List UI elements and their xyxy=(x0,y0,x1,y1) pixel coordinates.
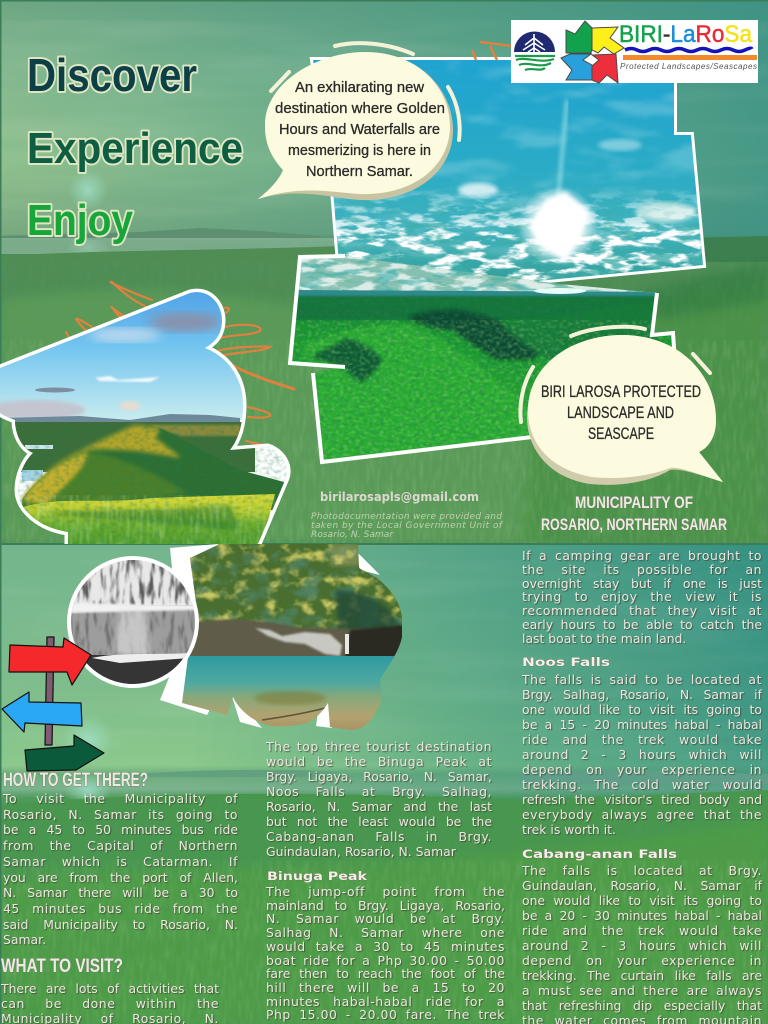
text block: Noos Falls: around 2 - 3 hours which will xyxy=(522,746,762,762)
heading: how to get there: HOW TO GET THERE? xyxy=(3,770,148,791)
text block: Binuga Peak: Salhag N. Samar where one xyxy=(266,925,505,940)
text block: Noos Falls: one would like to visit its going to xyxy=(522,702,762,716)
text block: top three destinations: Brgy. Ligaya, Rosario, N. Samar, xyxy=(266,768,492,784)
orange scribble rays behind left photo xyxy=(66,282,294,447)
text block: Binuga Peak: mainland to Brgy. Ligaya, Rosario, xyxy=(266,898,505,913)
text block: camping xyxy=(522,548,763,646)
speech bubble: exhilarating destination: An exhilarating new xyxy=(295,80,425,96)
text block: how to get there: N. Samar there will be a 30 to xyxy=(3,885,238,900)
logo subtitle: Protected Landscapes/Seascapes xyxy=(620,62,757,71)
photo: sky with sun and clouds xyxy=(310,57,706,283)
title: Discover Experience Enjoy: Experience xyxy=(27,124,243,173)
speech bubble: exhilarating destination: destination where Golden xyxy=(275,101,445,117)
text block: camping: trying to enjoy the view it is xyxy=(522,589,762,604)
title: Discover Experience Enjoy: Discover xyxy=(27,49,197,101)
text block: what to visit xyxy=(0,980,220,1024)
text block: top three destinations: but not the least would be the xyxy=(266,814,492,828)
text block: Noos Falls: The falls is said to be located at xyxy=(522,672,762,686)
text block: Binuga Peak: hill there will be a 15 to 20 xyxy=(266,980,505,995)
text block: top three destinations xyxy=(266,738,493,859)
speech bubble: Biri Larosa: SEASCAPE xyxy=(588,424,654,443)
municipality label xyxy=(541,493,727,534)
text block: top three destinations: Cabang-anan Falls in Brgy. xyxy=(266,828,492,844)
signpost pole xyxy=(45,637,54,745)
speech bubble: exhilarating destination xyxy=(258,43,460,200)
text block: how to get there: Samar which is Catarman. If xyxy=(3,854,238,869)
blue arrow xyxy=(2,692,82,732)
text block: how to get there: 45 minutes bus ride from the xyxy=(3,901,238,916)
photo credit caption xyxy=(311,512,504,540)
logo wordmark: BIRI-LaRoSa xyxy=(619,21,753,48)
text block: Noos Falls: be a 15 - 20 minutes habal - habal xyxy=(522,716,762,732)
heading: Binuga Peak: Binuga Peak xyxy=(267,869,367,883)
icon: four-colour puzzle mark xyxy=(561,21,624,83)
text block: camping: overnight stay but if one is just xyxy=(522,576,762,591)
logo: Biri-LaRoSa protected landscapes xyxy=(511,20,758,83)
text block: Noos Falls: trekking. The cold water would xyxy=(522,776,762,792)
text block: Noos Falls: Brgy. Salhag, Rosario, N. Samar if xyxy=(522,686,762,702)
email address: birilarosapls@gmail.com xyxy=(320,489,479,504)
text block: how to get there: said Municipality to Rosario, N. xyxy=(3,917,238,932)
text block: Cabang-anan Falls: ride and the trek would take xyxy=(522,922,762,938)
heading: Noos Falls: Noos Falls xyxy=(522,655,610,669)
panel: bottom background with sky and grass landscape xyxy=(0,544,768,1024)
title: Discover Experience Enjoy xyxy=(27,49,243,245)
wave and bar xyxy=(625,48,752,52)
text block: camping: If a camping gear are brought to xyxy=(522,548,762,563)
photo: black and white waterfall circle xyxy=(67,556,199,688)
text block: Cabang-anan Falls: depend on your experience in xyxy=(522,952,762,968)
text block: top three destinations: The top three tourist destination xyxy=(266,738,492,754)
text block: how to get there xyxy=(2,791,239,947)
text block: Binuga Peak xyxy=(266,884,506,1023)
text block: how to get there: you are from the port of Allen, xyxy=(3,870,238,885)
heading: what to visit: WHAT TO VISIT? xyxy=(1,956,123,977)
text block: Cabang-anan Falls: trekking. The curtain like falls are xyxy=(522,968,762,982)
municipality label: MUNICIPALITY OF xyxy=(575,493,693,512)
text block: Noos Falls: everybody always agree that the xyxy=(522,806,762,822)
text block: Cabang-anan Falls: a must see and there are always xyxy=(522,982,762,998)
signpost with three arrows xyxy=(2,637,104,771)
text block: what to visit: can be done within the xyxy=(1,996,219,1010)
text block: how to get there: To visit the Municipality of xyxy=(3,791,238,806)
icon: agency seal xyxy=(514,32,555,70)
heading: Cabang-anan Falls: Cabang-anan Falls xyxy=(522,847,677,861)
text block: Cabang-anan Falls: Guindaulan, Rosario, N. Samar if xyxy=(522,878,762,892)
text block: camping: the site its possible for an xyxy=(522,562,762,577)
text block: Noos Falls: refresh the visitor's tired body and xyxy=(522,792,762,806)
text block: Cabang-anan Falls: The falls is located at Brgy. xyxy=(522,862,762,878)
text block: how to get there: be a 45 to 50 minutes bus ride xyxy=(3,822,238,837)
text block: Binuga Peak: Php 15.00 - 20.00 fare. The trek xyxy=(266,1007,505,1022)
speech bubble: exhilarating destination: mesmerizing is here in xyxy=(288,143,431,159)
green arrow xyxy=(25,735,104,771)
text block: camping: recommended that they visit at xyxy=(522,603,762,618)
photo credit caption: taken by the Local Government Unit of xyxy=(311,521,504,531)
text block: Cabang-anan Falls: one would like to visit its going to xyxy=(522,892,762,908)
photo: waterfall pool in white-backed blob xyxy=(160,544,405,732)
red arrow xyxy=(9,638,91,685)
title: Discover Experience Enjoy: Enjoy xyxy=(27,196,133,245)
text block: Cabang-anan Falls xyxy=(522,862,764,1024)
text block: top three destinations: would be the Binuga Peak at xyxy=(266,754,492,768)
decorative orange scribble behind logo xyxy=(472,42,512,60)
text block: camping: early hours to be able to catch the xyxy=(522,617,762,632)
text block: Cabang-anan Falls: around 2 - 3 hours which will xyxy=(522,938,762,952)
photo credit caption: Rosario, N. Samar xyxy=(311,530,394,540)
text block: Binuga Peak: The jump-off point from the xyxy=(266,884,505,899)
text block: Noos Falls: trek is worth it. xyxy=(522,822,616,836)
text block: Binuga Peak: minutes habal-habal ride for a xyxy=(266,994,505,1009)
speech bubble: Biri Larosa: BIRI LAROSA PROTECTED xyxy=(541,382,701,401)
text block: Binuga Peak: boat ride for a Php 30.00 - 50.00 xyxy=(266,953,505,968)
text block: top three destinations: Noos Falls at Brgy. Salhag, xyxy=(266,784,492,798)
text block: top three destinations: Guindaulan, Rosario, N. Samar xyxy=(266,844,456,858)
text block: Binuga Peak: N. Samar would be at Brgy. xyxy=(266,911,505,926)
text block: Cabang-anan Falls: that refreshing dip especially that xyxy=(522,998,762,1012)
panel: top background with sky and grass landscape xyxy=(0,0,768,544)
speech bubble: Biri Larosa: LANDSCAPE AND xyxy=(567,403,674,422)
speech bubble: Biri Larosa xyxy=(520,327,723,485)
text block: Noos Falls: depend on your experience in xyxy=(522,762,762,776)
speech bubble: exhilarating destination: Northern Samar. xyxy=(306,164,413,180)
text block: camping: last boat to the main land. xyxy=(522,631,686,646)
photo: green hills under the sky xyxy=(285,250,705,466)
photo: yellow-green hills with blue sky in white blob frame xyxy=(0,285,300,545)
text block: Noos Falls: ride and the trek would take xyxy=(522,732,762,746)
photo credit caption: Photodocumentation were provided and xyxy=(311,512,502,522)
text block: top three destinations: Rosario, N. Samar and the last xyxy=(266,798,492,814)
text block: what to visit: There are lots of activities that xyxy=(1,980,219,996)
text block: Binuga Peak: would take a 30 to 45 minutes xyxy=(266,939,505,954)
speech bubble: exhilarating destination: Hours and Waterfalls are xyxy=(279,122,440,138)
text block: Cabang-anan Falls: be a 20 - 30 minutes habal - habal xyxy=(522,908,762,922)
text block: how to get there: Samar. xyxy=(3,932,46,947)
text block: how to get there: from the Capital of Northern xyxy=(3,838,238,853)
text block: Binuga Peak: fare then to reach the foot of the xyxy=(266,966,505,981)
text block: how to get there: Rosario, N. Samar its going to xyxy=(3,807,238,822)
text block: Noos Falls xyxy=(522,672,764,836)
